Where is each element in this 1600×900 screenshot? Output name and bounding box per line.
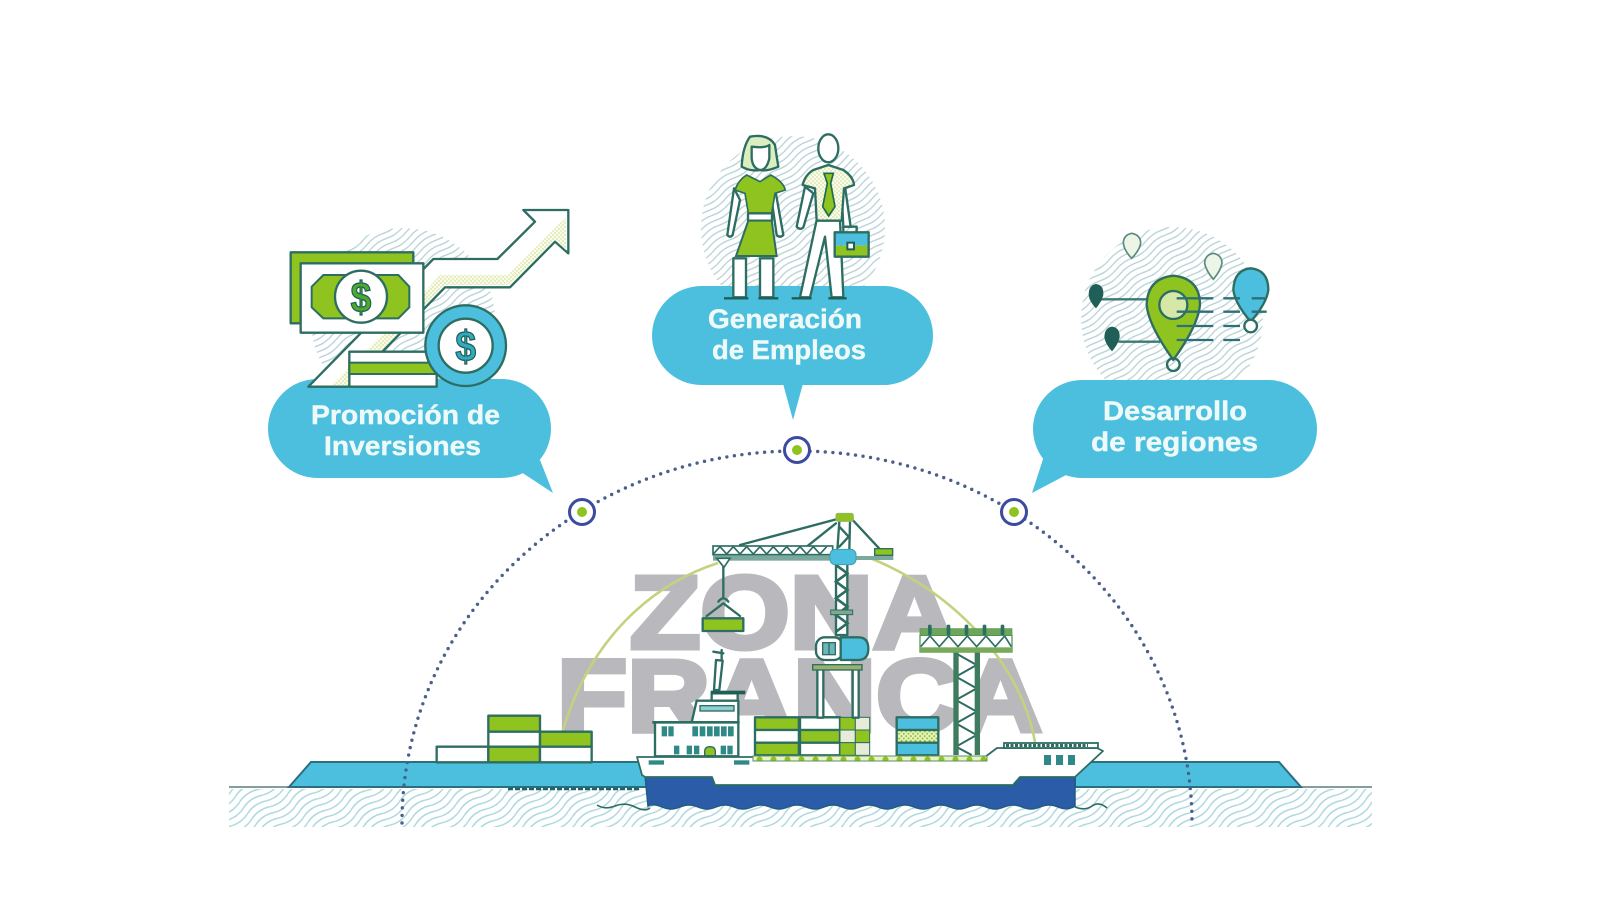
speech bubble bbox=[1033, 380, 1317, 478]
bow windows bbox=[1044, 755, 1075, 765]
tail bbox=[518, 460, 553, 493]
speech bubble bbox=[268, 379, 551, 478]
deck containers bbox=[755, 717, 840, 755]
green inner arc bbox=[563, 558, 1035, 742]
deck strip bbox=[753, 756, 987, 761]
arc node centre bbox=[784, 438, 810, 462]
waterline ripples bbox=[597, 804, 1107, 810]
title: Zona Franca: ZONA bbox=[630, 555, 956, 670]
ship hull: navy lower bbox=[645, 775, 1075, 809]
label: de regiones bbox=[1091, 427, 1258, 457]
label: Promoción de bbox=[311, 400, 500, 430]
ship hull: white upper bbox=[637, 748, 1103, 785]
label bbox=[311, 400, 500, 461]
tail bbox=[782, 380, 804, 420]
label: Generación bbox=[708, 304, 862, 334]
arc node left bbox=[570, 500, 594, 524]
tall crane bbox=[703, 513, 893, 718]
crane base and cab bbox=[813, 637, 868, 718]
ship bbox=[597, 650, 1107, 810]
wave disc bbox=[1081, 227, 1263, 409]
deck containers right bbox=[800, 717, 938, 755]
wave disc bbox=[701, 136, 885, 320]
title: Zona Franca: FRANCA bbox=[557, 639, 1042, 753]
crane hook and load bbox=[703, 558, 743, 631]
water hatched band bbox=[229, 789, 1372, 827]
label: de Empleos bbox=[712, 335, 866, 365]
label bbox=[708, 304, 866, 365]
right quay bbox=[1075, 762, 1301, 787]
speech bubble bbox=[652, 286, 933, 385]
superstructure bbox=[649, 650, 749, 765]
panel: Generación de Empleos bbox=[652, 134, 933, 420]
wave disc bbox=[311, 228, 495, 412]
quay edge dashes bbox=[508, 788, 640, 790]
panel: Promoción de Inversiones bbox=[268, 210, 568, 493]
icon: map pins bbox=[1089, 233, 1268, 371]
crane tower and jib bbox=[713, 513, 893, 635]
icon: woman and man bbox=[724, 134, 869, 298]
icon: rising arrow and money bbox=[291, 210, 568, 387]
stern rail bbox=[1004, 743, 1098, 748]
left quay bbox=[289, 762, 660, 787]
tail bbox=[1032, 450, 1068, 493]
woman bbox=[724, 136, 785, 298]
label: Desarrollo bbox=[1103, 396, 1247, 426]
title: Zona Franca bbox=[557, 555, 1042, 753]
icon: rising arrow and money: $ bbox=[351, 274, 372, 322]
gantry crane bbox=[920, 625, 1012, 755]
man bbox=[792, 134, 854, 298]
briefcase bbox=[835, 227, 869, 257]
horizon line bbox=[229, 786, 1372, 788]
quay containers bbox=[437, 716, 592, 762]
dotted protection arc bbox=[402, 451, 1192, 823]
label: Inversiones bbox=[324, 431, 481, 461]
label bbox=[1091, 396, 1258, 457]
arc node right bbox=[1002, 500, 1026, 524]
icon: rising arrow and money: $ bbox=[455, 323, 476, 371]
panel: Desarrollo de regiones bbox=[1032, 227, 1317, 493]
